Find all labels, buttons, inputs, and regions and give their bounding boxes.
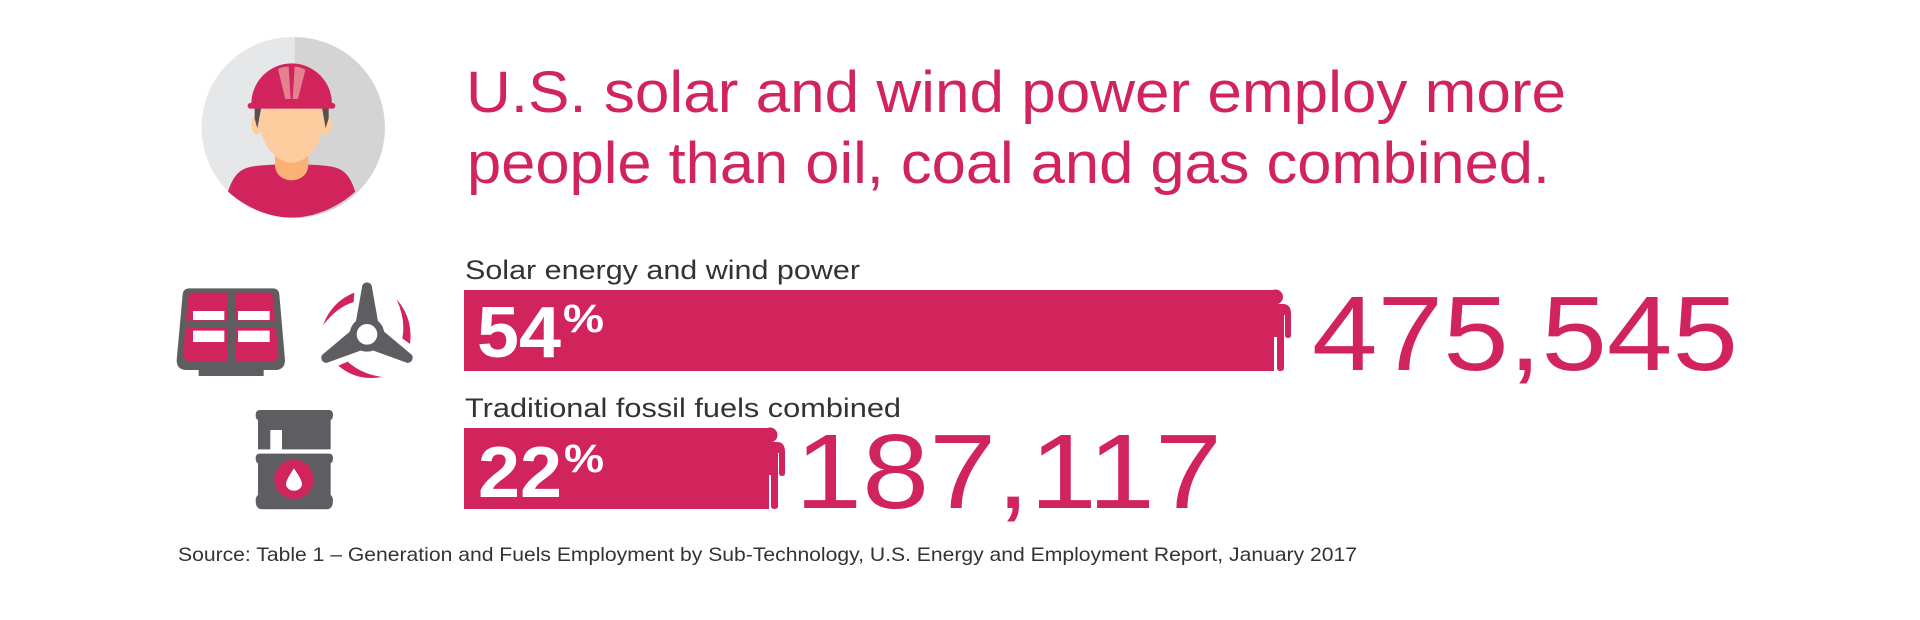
bar value: 22%: %: [564, 437, 604, 481]
icon: construction worker: [201, 37, 385, 218]
source note: Source: Table 1 – Generation and Fuels Employment by Sub-Technology, U.S. Energy and Employment Report, January 2017: [178, 544, 1357, 566]
bar: solar and wind 54%: [464, 290, 1291, 371]
bar value: 54%: [477, 293, 604, 373]
value: 187,117: 187,117: [795, 413, 1222, 531]
heading: people than oil, coal and gas combined.: [467, 131, 1550, 196]
heading: [466, 60, 1566, 196]
label: solar and wind: Solar energy and wind power: [465, 255, 860, 285]
bar: fossil fuels 22%: [464, 428, 785, 509]
bar value: 54%: %: [563, 297, 604, 341]
bar value: 54%: 54: [477, 293, 561, 373]
label: fossil fuels: Traditional fossil fuels combined: [465, 393, 901, 423]
icon: oil barrel: [256, 410, 333, 509]
value: 475,545: 475,545: [1312, 275, 1738, 393]
icon: wind turbine: [316, 282, 418, 378]
heading: U.S. solar and wind power employ more: [466, 60, 1566, 125]
bar value: 22%: [478, 433, 604, 513]
icon: solar panel: [177, 288, 285, 376]
bar value: 22%: 22: [478, 433, 562, 513]
